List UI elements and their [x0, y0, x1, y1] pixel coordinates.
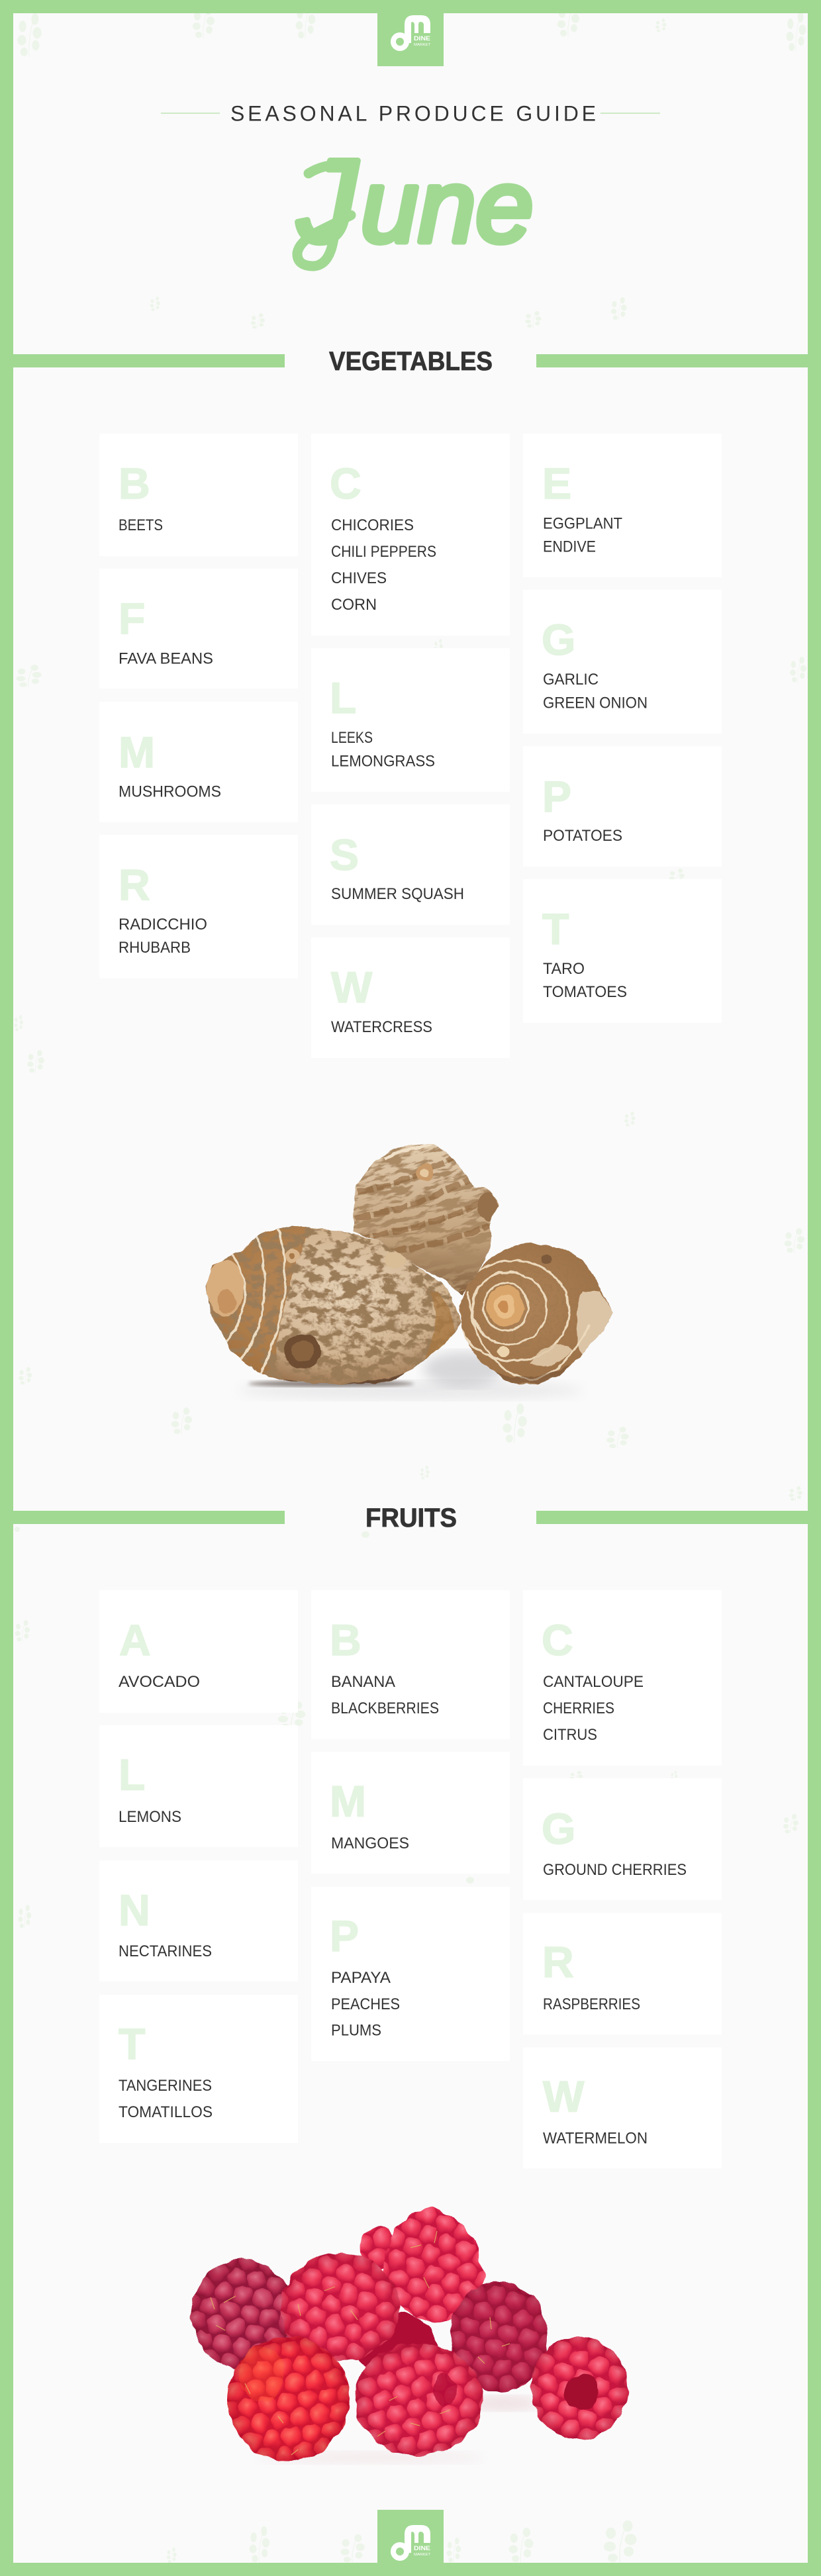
kicker: seasonal produce guide: SEASONAL PRODUCE GUIDE: [230, 102, 596, 126]
card: E: EGGPLANT: [543, 515, 622, 532]
card: L: L: [330, 673, 356, 722]
card: C: CHICORIES: [331, 516, 414, 534]
card: T: [99, 1995, 298, 2143]
section band: vegetables: VEGETABLES: [329, 347, 493, 376]
card: W: [523, 2047, 722, 2169]
card: G: GARLIC: [543, 671, 599, 689]
card: P: [523, 746, 722, 867]
card: R: [99, 835, 298, 978]
card: C: [311, 434, 510, 636]
section band: vegetables: [13, 347, 808, 376]
card: L: L: [119, 1750, 145, 1799]
berry: far right with hollow: [531, 2336, 628, 2440]
card: A: A: [119, 1615, 151, 1664]
card: L: LEMONGRASS: [331, 752, 435, 771]
berry: top: [383, 2208, 484, 2321]
berry: middle left: [281, 2254, 400, 2361]
logo: bottom: [377, 2510, 444, 2563]
card: W: [311, 937, 510, 1058]
title: June: une: [361, 149, 533, 264]
card: N: N: [119, 1885, 150, 1934]
berry: front left: [228, 2336, 350, 2461]
logo: top: MARKET: [414, 43, 431, 47]
top taro: [353, 1144, 499, 1296]
card: T: TOMATOES: [543, 983, 627, 1001]
card: G: GROUND CHERRIES: [543, 1861, 687, 1879]
card: W: W: [543, 2072, 585, 2121]
card: T: T: [542, 904, 569, 953]
title: June: [297, 135, 533, 267]
left taro: [202, 1223, 463, 1389]
card: R: R: [119, 860, 150, 909]
card: P: P: [542, 772, 571, 821]
right taro: [457, 1241, 616, 1387]
card: R: RADICCHIO: [119, 916, 207, 933]
card: G: G: [542, 615, 575, 664]
section band: fruits: FRUITS: [365, 1503, 457, 1533]
card: T: TANGERINES: [119, 2077, 212, 2095]
card: L: LEEKS: [331, 729, 373, 747]
card: C: C: [542, 1615, 573, 1664]
logo: top: DINE: [414, 35, 430, 42]
card: P: POTATOES: [543, 827, 622, 845]
card: L: LEMONS: [119, 1808, 181, 1826]
photo: raspberries: [191, 2208, 628, 2463]
card: E: ENDIVE: [543, 538, 596, 556]
card: R: R: [542, 1937, 574, 1986]
card: M: MANGOES: [331, 1835, 409, 1852]
card: C: CHILI PEPPERS: [331, 543, 436, 561]
berry: back left: [191, 2260, 295, 2369]
card: C: CITRUS: [543, 1726, 597, 1744]
fruit cards: [99, 1590, 722, 2169]
card: E: E: [542, 459, 571, 508]
card: F: [99, 569, 298, 689]
card: F: F: [119, 594, 145, 643]
card: G: GREEN ONION: [543, 694, 648, 712]
card: F: FAVA BEANS: [119, 650, 213, 667]
card: P: PEACHES: [331, 1995, 400, 2013]
card: C: CANTALOUPE: [543, 1673, 644, 1691]
card: W: WATERMELON: [543, 2129, 648, 2148]
card: W: WATERCRESS: [331, 1018, 432, 1036]
berry hairs: [211, 2231, 510, 2455]
card: G: G: [542, 1804, 575, 1853]
card: N: [99, 1860, 298, 1981]
card: A: [99, 1590, 298, 1713]
card: G: [523, 590, 722, 734]
card: R: RASPBERRIES: [543, 1995, 640, 2013]
card: S: [311, 804, 510, 925]
card: B: B: [330, 1615, 362, 1664]
card: M: [311, 1752, 510, 1874]
section band: fruits: [13, 1503, 808, 1533]
card: N: NECTARINES: [119, 1942, 212, 1960]
berry: front centre: [355, 2343, 482, 2456]
card: B: B: [119, 459, 150, 508]
card: C: C: [330, 459, 362, 508]
card: M: M: [330, 1777, 366, 1826]
card: B: [311, 1590, 510, 1739]
title: June: J: [297, 135, 358, 267]
card: T: TOMATILLOS: [119, 2103, 213, 2121]
photo: taro roots: [202, 1126, 616, 1400]
card: P: [311, 1887, 510, 2061]
card: R: [523, 1913, 722, 2035]
logo: top: [377, 13, 444, 66]
card: B: BANANA: [331, 1673, 396, 1691]
card: B: BEETS: [119, 516, 163, 534]
card: S: S: [330, 830, 359, 879]
card: M: MUSHROOMS: [119, 783, 221, 801]
card: B: [99, 434, 298, 556]
berry: small rear: [362, 2226, 396, 2269]
card: L: [311, 648, 510, 792]
card: S: SUMMER SQUASH: [331, 885, 464, 903]
card: C: [523, 1590, 722, 1766]
card: C: CORN: [331, 596, 377, 614]
card: B: BLACKBERRIES: [331, 1699, 439, 1717]
card: W: W: [331, 963, 373, 1012]
logo: bottom: DINE: [414, 2545, 430, 2552]
card: E: [523, 434, 722, 577]
card: P: P: [330, 1911, 359, 1960]
berry: middle filler: [358, 2314, 437, 2380]
card: T: [523, 879, 722, 1023]
card: A: AVOCADO: [119, 1673, 200, 1691]
card: P: PAPAYA: [331, 1969, 391, 1987]
vegetable cards: [99, 434, 722, 1058]
card: P: PLUMS: [331, 2022, 381, 2039]
card: C: CHIVES: [331, 569, 387, 587]
card: G: [523, 1778, 722, 1900]
card: C: CHERRIES: [543, 1699, 614, 1717]
card: M: [99, 702, 298, 822]
card: L: [99, 1725, 298, 1847]
card: M: M: [119, 728, 155, 777]
berry: right dark: [450, 2282, 548, 2392]
logo: bottom: MARKET: [414, 2553, 431, 2557]
card: T: T: [119, 2019, 145, 2068]
card: T: TARO: [543, 960, 585, 978]
card: R: RHUBARB: [119, 939, 191, 957]
